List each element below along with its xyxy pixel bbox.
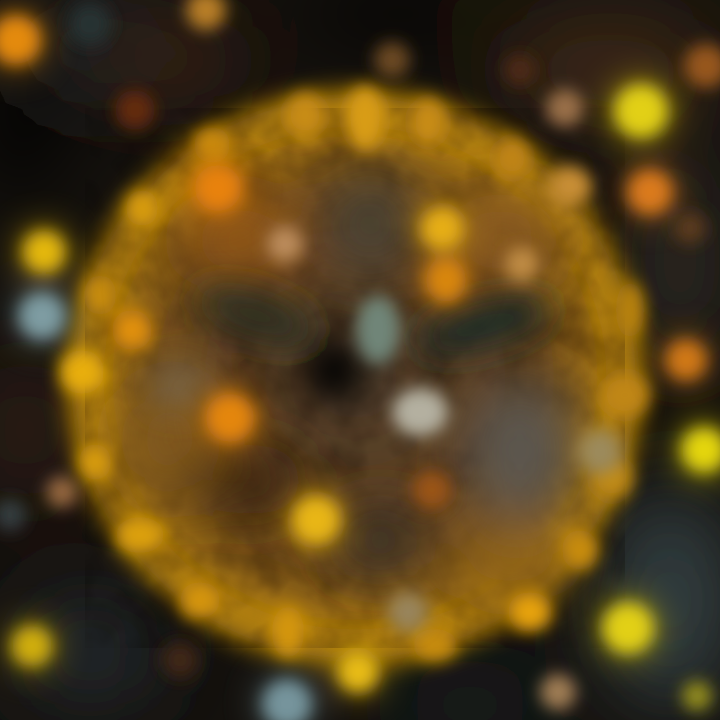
- dark centre wings: [150, 275, 558, 407]
- warm and dark patches in the centre: [120, 175, 575, 600]
- mottled texture inside the ring: [85, 108, 625, 648]
- golden ring disc: [71, 94, 639, 662]
- ring beads: soft amber glows along the ring: [60, 86, 649, 661]
- bright particles inside the ring: [195, 165, 622, 632]
